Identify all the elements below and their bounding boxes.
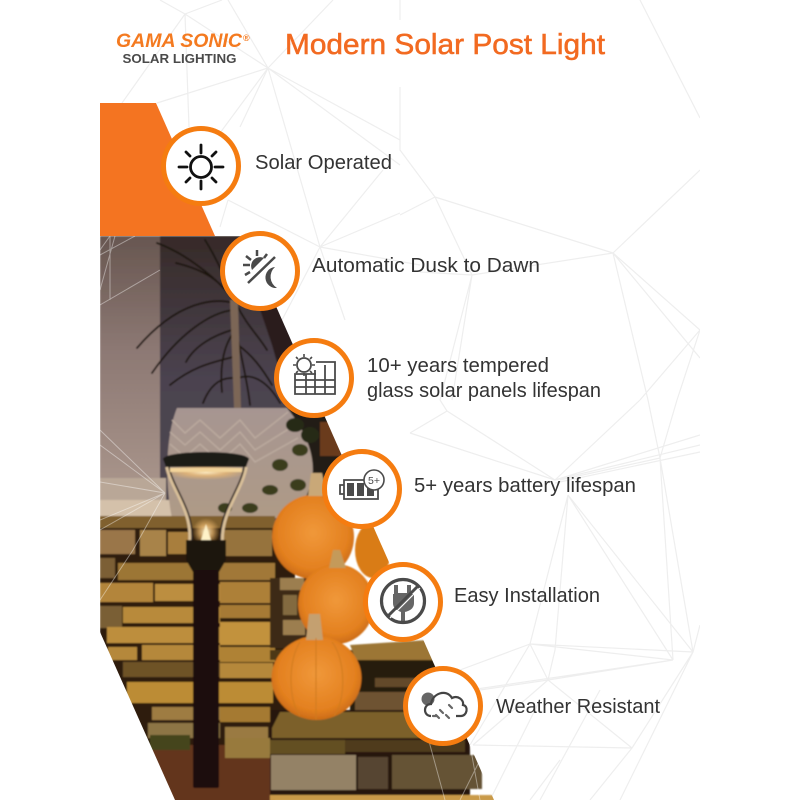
icon: battery 5+ — [324, 452, 400, 526]
feature: tempered glass solar panels — [276, 340, 601, 416]
feature: weather resistant: Weather Resistant — [496, 696, 660, 718]
mulch ground — [152, 744, 272, 800]
icon: sun — [164, 128, 238, 204]
feature: easy installation: Easy Installation — [454, 585, 600, 607]
stone wall — [100, 528, 295, 753]
feature: weather resistant — [406, 668, 660, 744]
icon: sun and moon — [222, 234, 298, 308]
icon: solar panel — [276, 340, 352, 416]
feature: easy installation — [366, 564, 600, 640]
plant — [137, 240, 285, 405]
planter — [167, 408, 313, 518]
pumpkin front — [272, 636, 362, 720]
title: Modern Solar Post Light — [285, 29, 605, 61]
icon: cloud and rain — [406, 668, 480, 744]
feature: battery lifespan: 5+ years battery lifespan — [414, 475, 636, 497]
feature: solar operated: Solar Operated — [255, 152, 392, 174]
lines over photo — [100, 236, 480, 800]
pumpkin back — [272, 495, 354, 579]
icon: crossed plug — [366, 564, 440, 640]
text block: 10+ years tempered — [367, 355, 549, 377]
feature: automatic dusk to dawn: Automatic Dusk to Dawn — [312, 255, 540, 277]
text block — [367, 355, 601, 402]
feature: battery lifespan — [324, 452, 636, 526]
text block: glass solar panels lifespan — [367, 380, 601, 402]
lamp — [163, 452, 249, 788]
pumpkin middle — [298, 564, 374, 644]
logo: SOLAR LIGHTING — [122, 52, 236, 66]
ivy — [218, 418, 319, 513]
photo panel: lamp and pumpkins — [100, 236, 500, 800]
pumpkins — [272, 473, 391, 720]
icon: battery 5+: 5+ — [368, 475, 380, 487]
steps — [270, 578, 310, 648]
orange corner panel — [100, 103, 215, 236]
logo: GAMA SONIC — [116, 30, 243, 52]
logo — [116, 30, 250, 66]
background network lines — [122, 0, 700, 800]
plant trunk — [230, 300, 241, 408]
pumpkin back small — [355, 522, 391, 578]
lamp glow — [172, 466, 242, 480]
wall and pillar — [159, 236, 292, 522]
feature: automatic dusk to dawn — [222, 234, 540, 308]
logo: ® — [243, 33, 250, 43]
ledge — [100, 516, 275, 528]
feature: solar operated — [164, 128, 392, 204]
